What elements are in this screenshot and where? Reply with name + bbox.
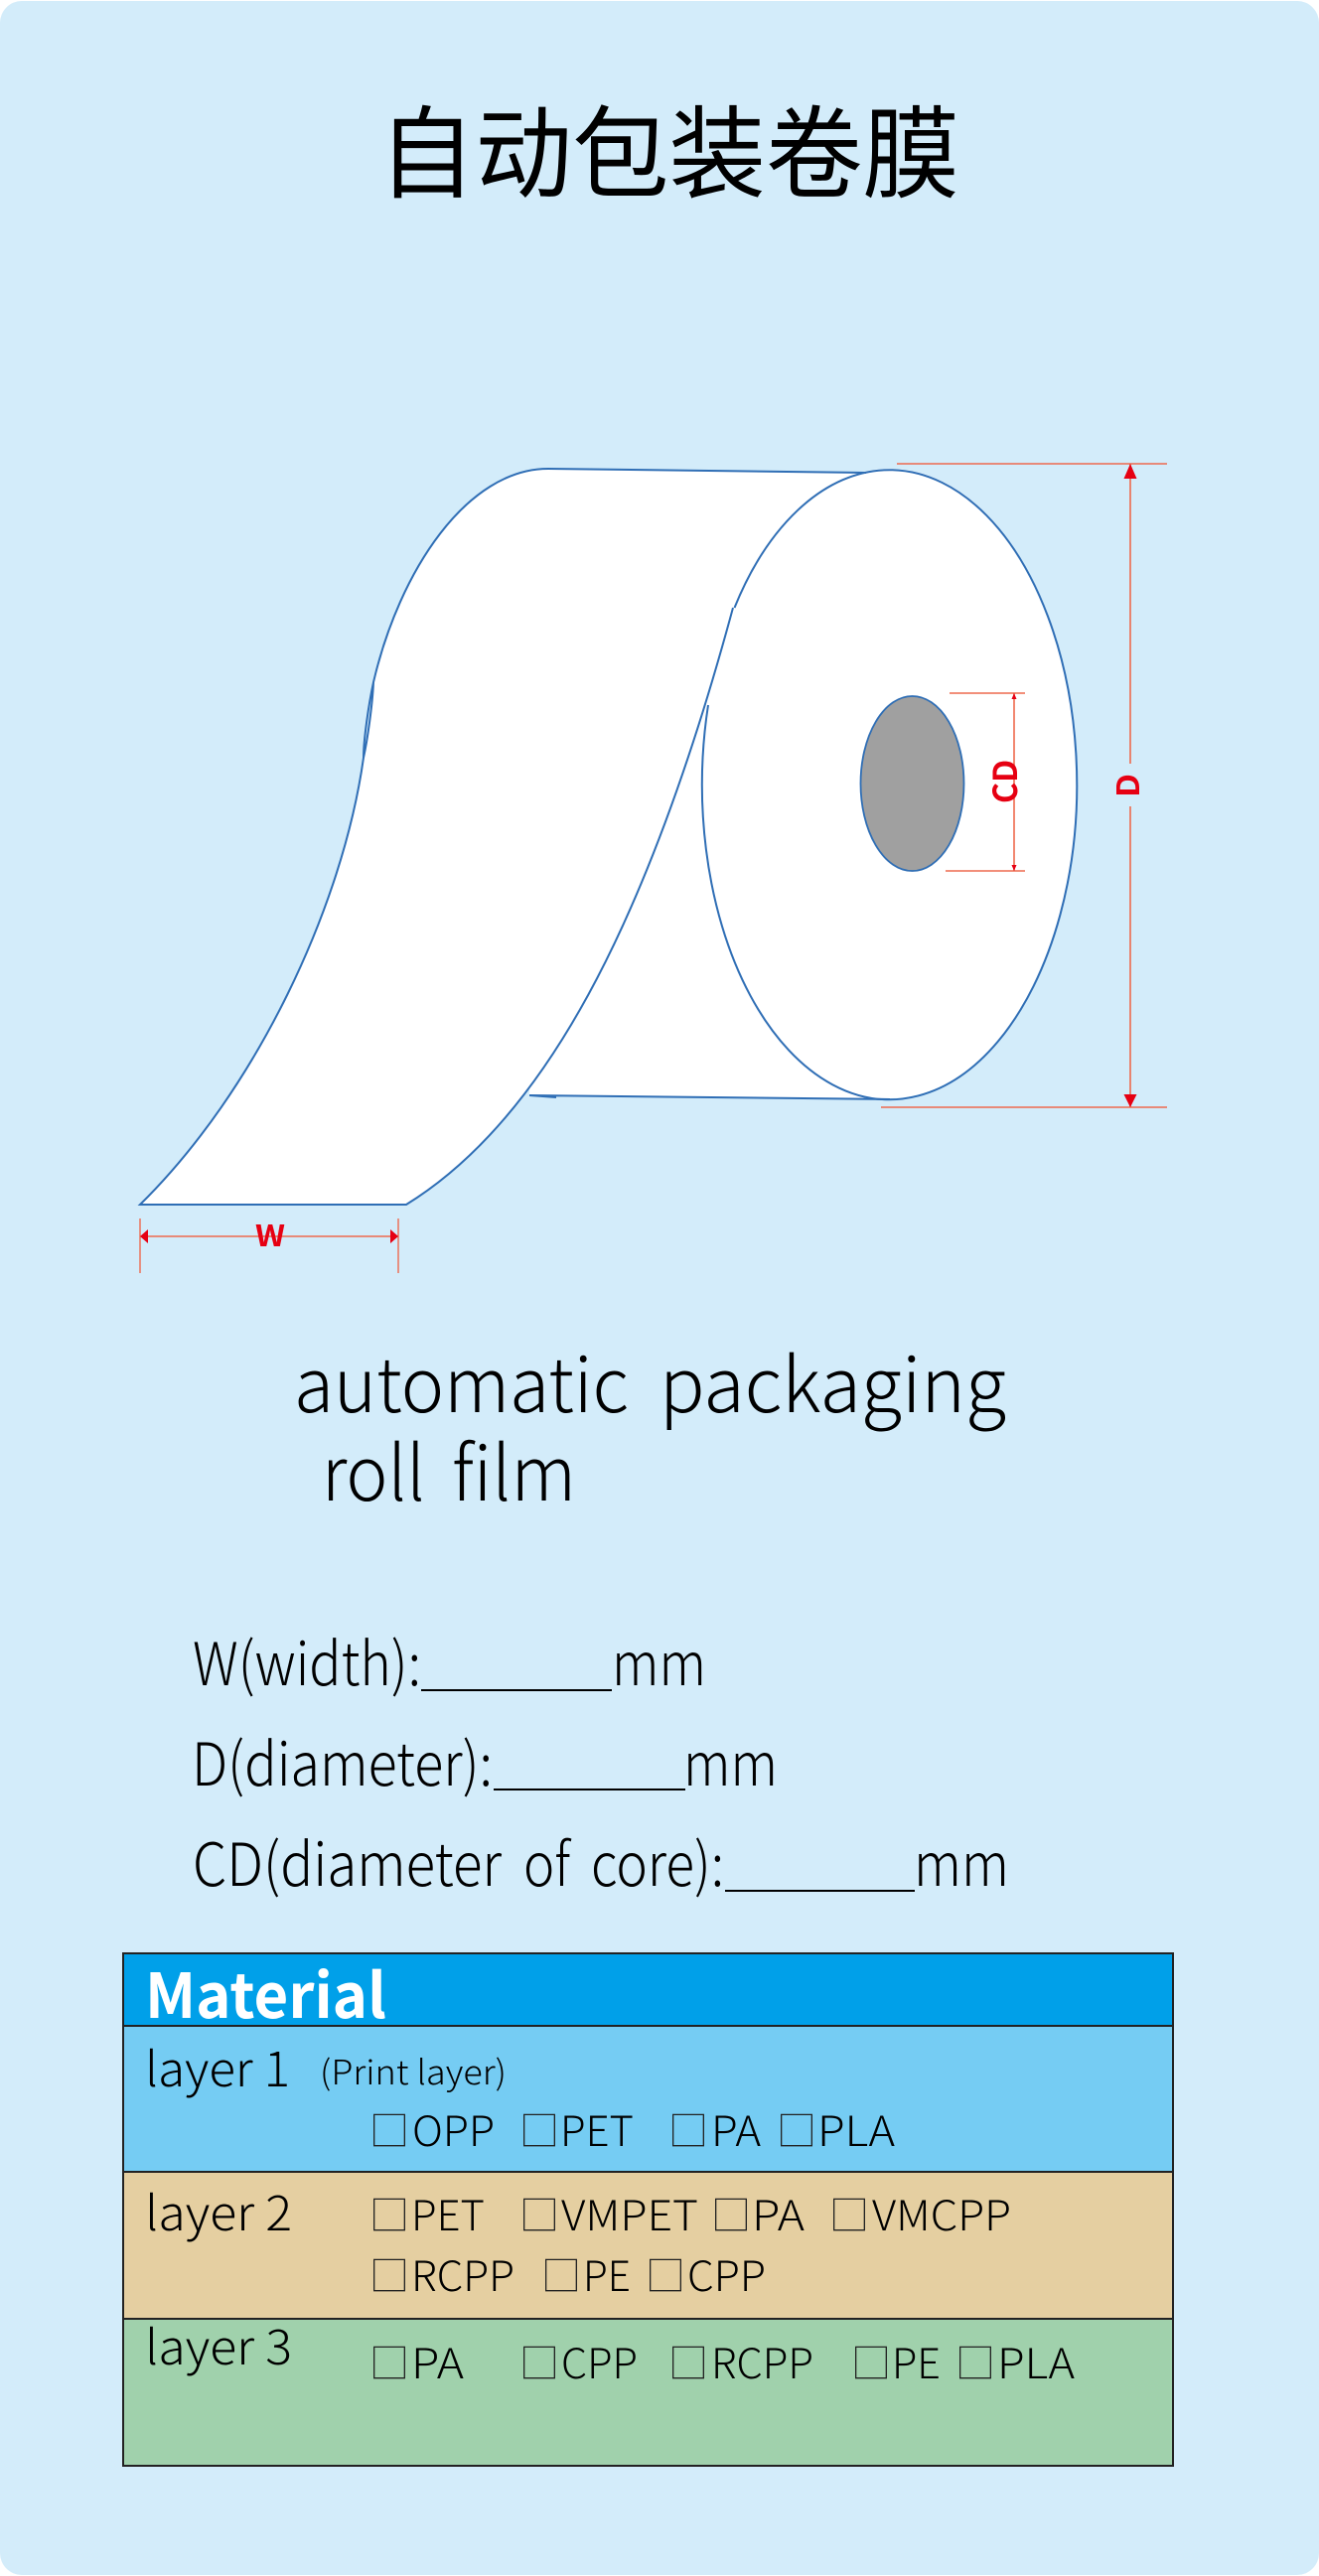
core diameter field: CD(diameter [193, 1817, 502, 1904]
layer 2 row: □ [829, 2184, 869, 2241]
layer 1 row: PA [711, 2098, 761, 2159]
layer 3 row: □ [668, 2332, 708, 2389]
dimension D [881, 464, 1167, 1107]
layer 3 row: □ [851, 2332, 891, 2389]
layer 1 row: layer 1 [145, 2031, 290, 2100]
dimension D: D [1103, 774, 1148, 797]
layer 2 row: CPP [687, 2243, 766, 2304]
layer 3 row: PLA [997, 2331, 1075, 2391]
layer 2 row: layer 2 [145, 2175, 292, 2244]
dimension W [140, 1212, 398, 1273]
core diameter field: of [523, 1817, 572, 1904]
layer 2 row: VMCPP [872, 2183, 1011, 2243]
layer 2 row: □ [369, 2244, 409, 2302]
roll film diagram [140, 464, 1167, 1273]
unrolled film band [140, 469, 866, 1205]
layer 2 row: □ [711, 2184, 751, 2241]
diameter field: D(diameter): [192, 1717, 493, 1803]
material header: Material [145, 1946, 386, 2036]
layer 1 row [123, 2026, 1173, 2172]
layer 2 row: VMPET [561, 2183, 698, 2243]
diameter field: mm [683, 1717, 778, 1803]
width field: W(width): [193, 1617, 421, 1703]
core diameter field [193, 1817, 1009, 1904]
layer 2 row: PA [752, 2183, 805, 2243]
layer 3 row [123, 2309, 1173, 2466]
layer 2 row: PE [583, 2243, 631, 2304]
film outline [140, 469, 890, 1205]
title: 自动包装卷膜 [378, 74, 959, 219]
layer 2 row: RCPP [411, 2243, 514, 2304]
product name: packaging [660, 1325, 1006, 1434]
layer 1 row: (Print layer) [320, 2046, 507, 2094]
layer 3 row: layer 3 [145, 2309, 292, 2378]
core hole [860, 696, 963, 871]
layer 3 row: □ [519, 2332, 559, 2389]
layer 2 row [123, 2172, 1173, 2319]
material table [123, 1946, 1173, 2466]
layer 3 row: PE [892, 2331, 941, 2391]
layer 1 row: □ [668, 2099, 708, 2157]
width field: mm [612, 1617, 706, 1703]
product name [294, 1325, 1006, 1522]
material header [123, 1946, 1173, 2036]
layer 2 row: □ [519, 2184, 559, 2241]
width field [193, 1617, 706, 1703]
product name: roll [322, 1413, 425, 1522]
layer 1 row: PLA [817, 2098, 895, 2159]
roll side face fill [702, 469, 1078, 1098]
layer 2 row: PET [411, 2183, 485, 2243]
layer 3 row: CPP [561, 2331, 638, 2391]
layer 3 row: RCPP [711, 2331, 813, 2391]
layer 2 row: □ [369, 2184, 409, 2241]
layer 1 row: □ [777, 2099, 816, 2157]
core diameter field: core): [591, 1817, 724, 1904]
layer 3 row: PA [411, 2331, 464, 2391]
roll body [529, 469, 890, 1099]
layer 2 row: □ [646, 2244, 685, 2302]
layer 2 row: □ [541, 2244, 581, 2302]
layer 1 row: □ [369, 2099, 409, 2157]
dimension W: W [255, 1212, 285, 1255]
roll side face outline [702, 470, 1077, 1099]
product name: automatic [294, 1325, 629, 1434]
diameter field [192, 1717, 778, 1803]
layer 3 row: □ [369, 2332, 409, 2389]
layer 1 row: PET [560, 2098, 634, 2159]
layer 3 row: □ [955, 2332, 995, 2389]
dimension CD [946, 693, 1027, 871]
core diameter field: mm [914, 1817, 1009, 1904]
dimension CD: CD [979, 760, 1027, 803]
layer 1 row: OPP [412, 2098, 495, 2159]
layer 1 row: □ [519, 2099, 559, 2157]
product name: film [452, 1413, 576, 1522]
size fields [192, 1617, 1009, 1904]
